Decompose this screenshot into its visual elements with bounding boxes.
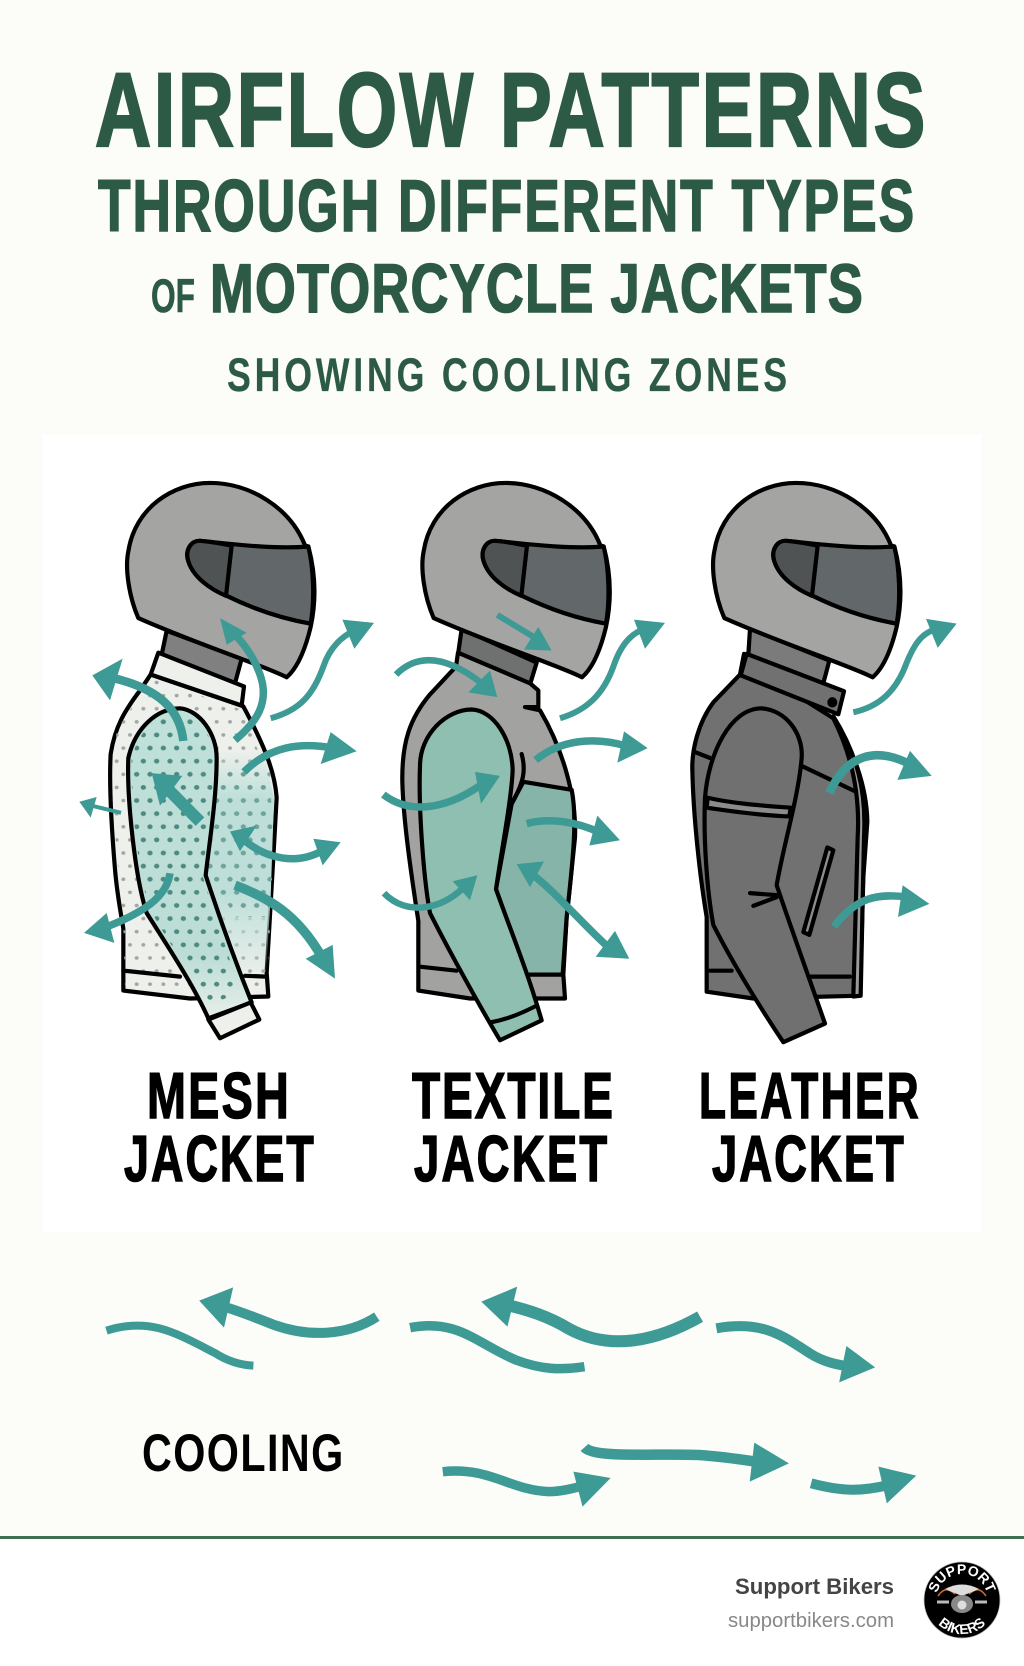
arrow: upper right <box>716 1326 875 1382</box>
wave: middle <box>410 1326 584 1369</box>
hem lines <box>123 971 267 977</box>
arrow: lower back exit <box>84 873 170 943</box>
figure: mesh jacket <box>79 483 374 1038</box>
neck <box>748 629 829 683</box>
arrow: lower two <box>584 1443 789 1482</box>
cuff <box>208 1002 259 1038</box>
label: mesh: MESH <box>147 1061 289 1133</box>
arrow: upper left <box>199 1287 377 1333</box>
jacket body <box>402 653 575 998</box>
neck <box>458 629 537 684</box>
label: leather jacket: JACKET <box>712 1122 904 1195</box>
arrow: lower one <box>443 1471 611 1507</box>
wave: left <box>106 1325 253 1366</box>
elbow creases <box>750 893 777 906</box>
torso mesh dots <box>112 678 275 995</box>
arrow: exit up right <box>271 620 374 718</box>
label: cooling: COOLING <box>142 1424 343 1483</box>
figure: leather jacket <box>692 483 957 1042</box>
arrow: sleeve intake upper <box>383 772 500 807</box>
arrow: torso exit <box>527 816 620 845</box>
label: mesh jacket: JACKET <box>124 1122 314 1195</box>
title block <box>95 51 925 401</box>
sleeve <box>128 708 252 1018</box>
footer rule <box>0 1536 1024 1539</box>
cuff line <box>491 1006 535 1022</box>
arrow: sleeve center <box>152 773 200 822</box>
arrow: lower torso exit <box>235 885 335 979</box>
arrow: sleeve intake lower <box>384 875 477 908</box>
labels <box>124 1059 919 1195</box>
arrow: two way torso <box>517 861 629 959</box>
logo: SUPPORT <box>929 1564 996 1592</box>
logo: BIKERS <box>938 1617 984 1634</box>
neck <box>162 631 242 683</box>
helmet <box>422 483 610 677</box>
label: textile jacket: JACKET <box>414 1122 607 1195</box>
title line: airflow patterns: AIRFLOW PATTERNS <box>95 51 925 169</box>
front cooling panel <box>496 782 574 975</box>
footer <box>0 1536 1024 1638</box>
title word: of: OF <box>151 269 195 322</box>
jacket seams <box>695 752 856 977</box>
armpit seam <box>512 754 524 804</box>
arrow: exit up right <box>560 620 665 718</box>
label: leather: LEATHER <box>699 1060 919 1132</box>
arrow: upper middle <box>481 1287 700 1341</box>
torso dots over zone <box>207 770 273 917</box>
airflow arrows band <box>106 1287 916 1507</box>
helmet <box>127 483 314 677</box>
subtitle: SHOWING COOLING ZONES <box>227 348 787 401</box>
panel: jacket comparison <box>42 435 982 1232</box>
arrow: chest exit <box>536 731 648 763</box>
sleeve band <box>707 798 791 816</box>
arrow: lower three <box>811 1467 916 1503</box>
sleeve <box>705 708 825 1042</box>
title line: motorcycle jackets: MOTORCYCLE JACKETS <box>210 250 863 327</box>
logo <box>924 1562 1000 1638</box>
collar <box>741 654 844 714</box>
arrow: chin vent <box>220 618 263 740</box>
front zip stripe <box>833 716 864 996</box>
sleeve mesh dots <box>131 712 240 1004</box>
figure: textile jacket <box>383 483 665 1040</box>
arrow: back small <box>79 797 121 818</box>
arrow: torso exit <box>834 885 929 927</box>
brand name: Support Bikers <box>735 1574 894 1599</box>
collar snap <box>827 697 837 708</box>
arrow: shoulder intake <box>396 660 497 697</box>
title line: through different types: THROUGH DIFFERENT TYPES <box>98 165 914 247</box>
helmet <box>713 483 900 677</box>
jacket body <box>692 654 867 998</box>
arrow: chest exit <box>244 732 357 772</box>
arrow: helmet vent <box>497 615 552 651</box>
sleeve <box>420 710 542 1040</box>
pocket <box>803 847 833 935</box>
hem lines <box>420 967 457 971</box>
brand url: supportbikers.com <box>728 1610 894 1632</box>
label: textile: TEXTILE <box>412 1059 613 1132</box>
cooling zone: torso <box>207 750 274 972</box>
arrow: shoulder exit <box>92 659 183 741</box>
arrow: chest exit <box>829 751 932 793</box>
arrow: two way torso <box>230 826 341 865</box>
collar <box>151 653 244 706</box>
jacket body <box>110 675 277 998</box>
arrow: exit up right <box>853 619 957 712</box>
